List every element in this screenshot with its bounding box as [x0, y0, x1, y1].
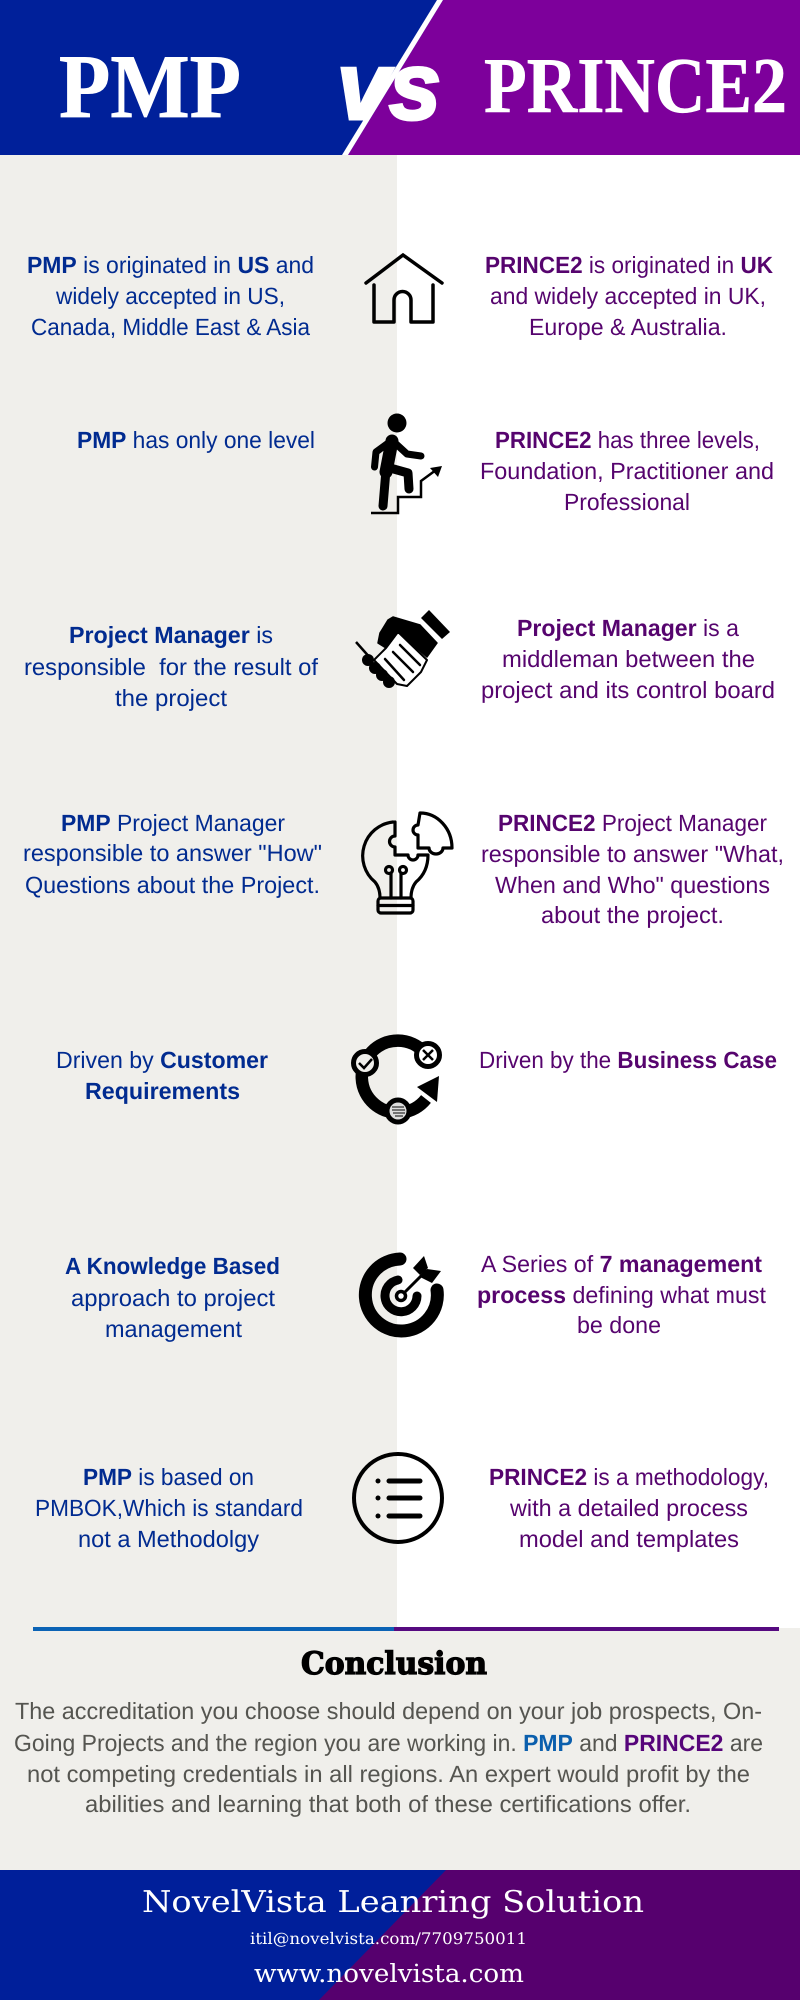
row 4 left: PMP How: Questions about the Project.: [25, 872, 320, 898]
footer banner: [0, 1870, 800, 2000]
row 7 left: PMBOK: not a Methodolgy: [78, 1526, 259, 1552]
icon: target with arrow: [365, 1256, 441, 1331]
row 3 right: project manager middleman: project and its control board: [481, 677, 775, 703]
title: vs: vs: [337, 33, 441, 140]
row 6 left: knowledge based: A Knowledge Based: [65, 1253, 280, 1279]
row 3 right: project manager middleman: [481, 615, 775, 703]
footer company name: NovelVista Leanring Solution: [142, 1885, 644, 1920]
conclusion paragraph: Going Projects and the region you are working in. PMP and PRINCE2 are: [14, 1730, 763, 1756]
row 6 left: knowledge based: approach to project: [71, 1285, 275, 1311]
row 4 left: PMP How: responsible to answer "How": [23, 840, 322, 866]
row 3 right: project manager middleman: Project Manager is a: [517, 615, 740, 641]
row 1 left: PMP origin: Canada, Middle East & Asia: [31, 314, 311, 340]
row 7 left: PMBOK: PMP is based on: [83, 1464, 254, 1490]
row 3 left: project manager result: the project: [115, 685, 227, 711]
row 7 right: methodology: [489, 1464, 769, 1552]
row 4 right: PRINCE2 What When Who: about the project.: [541, 902, 724, 928]
row 6 right: management processes: process defining what must: [477, 1282, 766, 1308]
footer website: www.novelvista.com: [254, 1959, 524, 1988]
header banner: [0, 0, 800, 155]
row 3 left: project manager result: [24, 622, 318, 711]
row 1 left: PMP origin: [27, 252, 314, 340]
row 7 right: methodology: with a detailed process: [509, 1495, 748, 1521]
row 1 right: PRINCE2 origin: and widely accepted in UK,: [490, 283, 766, 309]
row 6 left: knowledge based: [65, 1253, 280, 1342]
icon: person climbing steps: [371, 414, 442, 513]
conclusion paragraph: abilities and learning that both of these certifications offer.: [85, 1791, 691, 1817]
row 6 left: knowledge based: management: [105, 1316, 242, 1342]
conclusion paragraph: not competing credentials in all regions. An expert would profit by the: [27, 1761, 750, 1787]
heading: conclusion: Conclusion: [301, 1646, 487, 1682]
row 1 left: PMP origin: widely accepted in US,: [55, 283, 285, 309]
icon: handshake: [356, 610, 450, 688]
row 3 right: project manager middleman: middleman between the: [502, 646, 755, 672]
row 4 right: PRINCE2 What When Who: PRINCE2 Project Manager: [498, 810, 767, 836]
icon: bulb with puzzle piece: [363, 813, 452, 913]
row 1 right: PRINCE2 origin: [485, 252, 773, 340]
row 4 right: PRINCE2 What When Who: When and Who" questions: [495, 872, 770, 898]
row 5 left: customer requirements: [56, 1047, 268, 1104]
row 1 left: PMP origin: PMP is originated in US and: [27, 252, 314, 278]
row 4 right: PRINCE2 What When Who: [481, 810, 784, 928]
row 6 right: management processes: A Series of 7 management: [481, 1251, 762, 1277]
row 5 right: business case: Driven by the Business Case: [479, 1047, 777, 1073]
row 7 right: methodology: PRINCE2 is a methodology,: [489, 1464, 769, 1490]
row 2 right: PRINCE2 levels: [480, 427, 774, 515]
icon: house: [366, 255, 442, 322]
row 4 left: PMP How: PMP Project Manager: [61, 810, 285, 836]
row 2 right: PRINCE2 levels: Professional: [564, 489, 690, 515]
row 2 left: PMP levels: PMP has only one level: [77, 427, 315, 453]
row 6 right: management processes: [477, 1251, 766, 1338]
row 2 right: PRINCE2 levels: Foundation, Practitioner and: [480, 458, 774, 484]
row 3 left: project manager result: Project Manager is: [69, 622, 273, 648]
conclusion paragraph: The accreditation you choose should depend on your job prospects, On-: [15, 1698, 762, 1724]
icon: list in circle: [354, 1454, 442, 1542]
panel: conclusion: [0, 1627, 800, 1870]
row 4 right: PRINCE2 What When Who: responsible to answer "What,: [481, 841, 784, 867]
row 7 left: PMBOK: PMBOK,Which is standard: [35, 1495, 303, 1521]
row 7 left: PMBOK: [35, 1464, 303, 1552]
row 1 right: PRINCE2 origin: PRINCE2 is originated in UK: [485, 252, 773, 278]
icon: cycle arrow: [354, 1041, 440, 1122]
row 7 right: methodology: model and templates: [519, 1526, 739, 1552]
row 3 left: project manager result: responsible for the result of: [24, 654, 318, 680]
row 5 left: customer requirements: Requirements: [85, 1078, 240, 1104]
conclusion paragraph: [14, 1698, 763, 1817]
row 1 right: PRINCE2 origin: Europe & Australia.: [529, 314, 727, 340]
row 2 right: PRINCE2 levels: PRINCE2 has three levels,: [495, 427, 760, 453]
row 4 left: PMP How: [23, 810, 322, 898]
row 6 right: management processes: be done: [577, 1312, 661, 1338]
footer contact: itil@novelvista.com/7709750011: [250, 1929, 527, 1948]
title: PMP: PMP: [59, 36, 241, 137]
row 5 left: customer requirements: Driven by Customer: [56, 1047, 268, 1073]
